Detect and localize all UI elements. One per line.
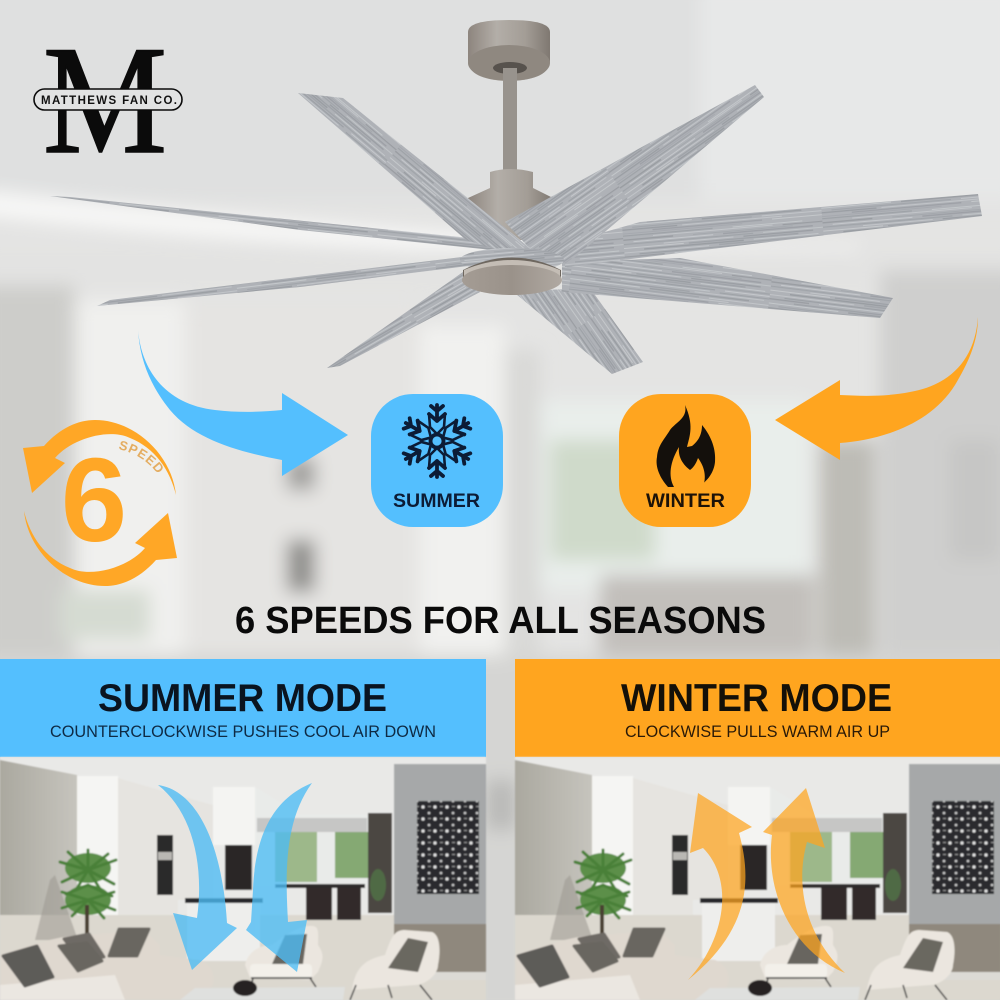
label: winter: WINTER bbox=[646, 491, 725, 512]
summer badge bbox=[371, 394, 503, 527]
far fan blades bbox=[50, 194, 982, 374]
winter badge bbox=[619, 394, 751, 527]
label: summer: SUMMER bbox=[393, 491, 480, 512]
title: 6 SPEEDS FOR ALL SEASONS bbox=[235, 600, 766, 642]
logo: Matthews Fan Co.: MATTHEWS FAN CO. bbox=[41, 95, 177, 107]
arrow: winter orange curve bbox=[775, 317, 978, 460]
canopy and downrod bbox=[468, 20, 553, 240]
arrows: warm air up bbox=[688, 788, 845, 980]
6 speed icon: SPEED bbox=[119, 441, 163, 472]
logo: Matthews Fan Co.: M bbox=[43, 14, 167, 186]
icon: snowflake bbox=[402, 405, 472, 477]
6 speed icon: 6 bbox=[61, 434, 127, 567]
heading: winter mode: WINTER MODE bbox=[621, 677, 892, 720]
subheading: summer: COUNTERCLOCKWISE PUSHES COOL AIR DOWN bbox=[50, 723, 436, 741]
arrow: summer blue curve bbox=[138, 330, 348, 476]
panel: winter mode header bbox=[515, 659, 1000, 757]
heading: summer mode: SUMMER MODE bbox=[98, 677, 387, 720]
panel: summer mode header bbox=[0, 659, 486, 757]
photo: summer room bbox=[0, 757, 486, 1000]
near fan blades bbox=[298, 85, 764, 264]
motor hub bbox=[460, 248, 564, 295]
6 speed icon bbox=[23, 420, 177, 586]
ceiling fan bbox=[50, 20, 982, 374]
photo: winter room bbox=[515, 757, 1000, 1000]
icon: flame bbox=[657, 405, 715, 487]
arrows: cool air down bbox=[158, 783, 312, 972]
subheading: winter: CLOCKWISE PULLS WARM AIR UP bbox=[625, 723, 890, 741]
